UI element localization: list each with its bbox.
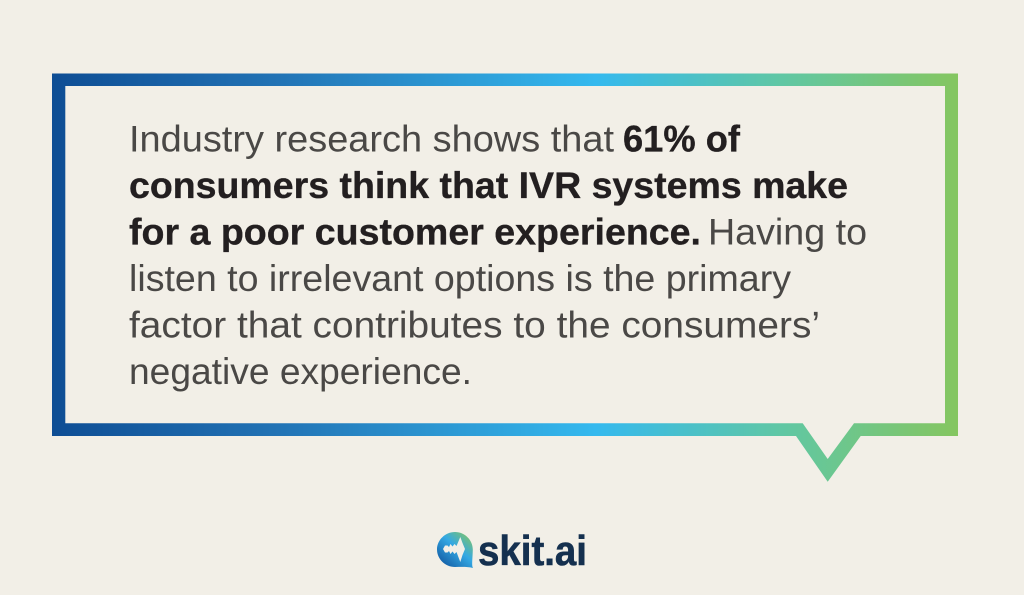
line 4: listen to irrelevant options is the primary [129, 258, 792, 299]
line 6: negative experience. [129, 351, 472, 392]
line 3: for a poor customer experience. [129, 212, 701, 252]
speech bubble frame with tail [52, 74, 958, 482]
line 1: 61% of [623, 118, 741, 160]
line 1: Industry research shows that [129, 118, 615, 160]
icon: speech bubble with waveform [437, 532, 473, 568]
line 2: consumers think that IVR systems make [129, 165, 848, 206]
line 5: factor that contributes to the consumers’ [129, 304, 820, 346]
line 3: Having to [708, 212, 867, 252]
wordmark: skit.ai [478, 527, 587, 574]
logo: skit.ai [437, 527, 587, 574]
quote text [129, 118, 867, 392]
